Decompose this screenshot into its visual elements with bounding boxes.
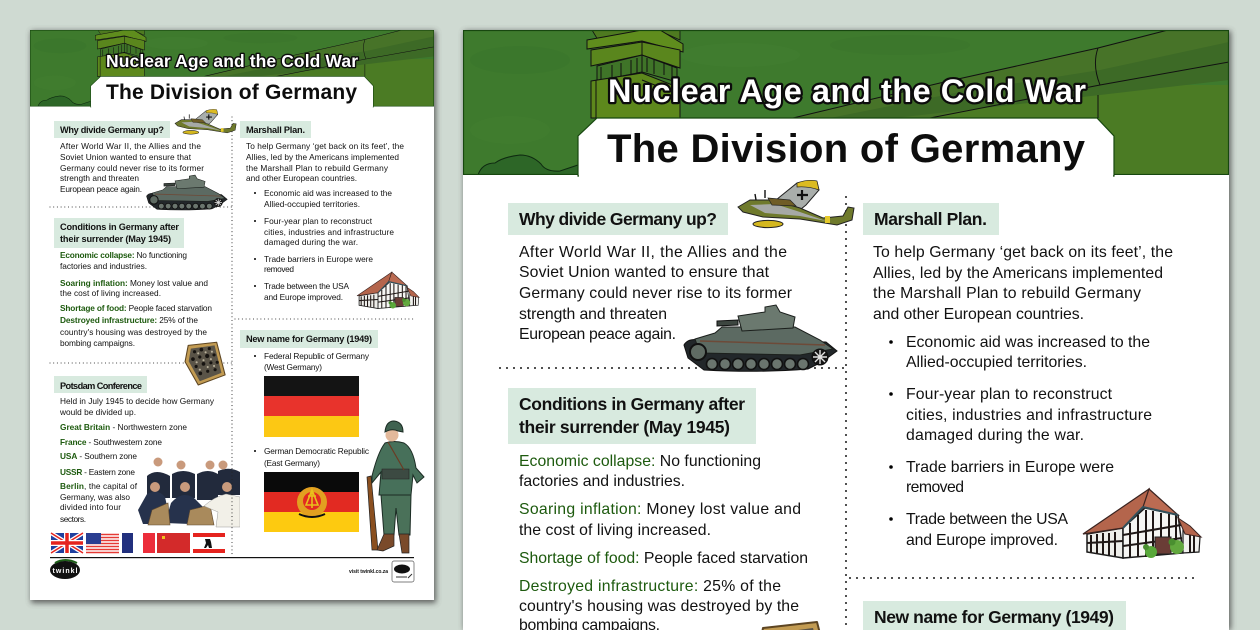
small section: Potsdam Conference: Berlin, the capital of bbox=[60, 481, 138, 491]
small section: conditions in Germany: Shortage of food: People faced starvation bbox=[60, 303, 212, 313]
large poster main title: The Division of Germany bbox=[607, 127, 1086, 171]
section: why divide Germany up: Germany could never rise to its former bbox=[519, 285, 792, 302]
large poster header banner bbox=[463, 30, 1229, 178]
icon: small tank bbox=[147, 175, 227, 210]
small section: conditions in Germany: Destroyed infrastructure: 25% of the bbox=[60, 315, 198, 325]
small section: Potsdam Conference: Germany, was also bbox=[60, 492, 130, 502]
small section: Potsdam Conference: USSR - Eastern zone bbox=[60, 467, 135, 477]
small section: new name for Germany: (West Germany) bbox=[264, 362, 322, 372]
section: conditions in Germany after surrender: Soaring inflation: Money lost value and bbox=[519, 501, 801, 518]
panel: small full poster preview bbox=[30, 30, 436, 603]
section: Marshall Plan: Trade barriers in Europe were bbox=[906, 459, 1114, 476]
small poster header banner bbox=[30, 30, 434, 108]
section: why divide Germany up: Why divide Germany up? bbox=[519, 209, 717, 229]
small section: why divide Germany: strength and threaten bbox=[60, 173, 139, 183]
section: why divide Germany up: European peace again. bbox=[519, 326, 676, 343]
section: why divide Germany up: Soviet Union wanted to ensure that bbox=[519, 264, 770, 281]
section: Marshall Plan: cities, industries and infrastructure bbox=[906, 407, 1152, 424]
icon: soldier bbox=[367, 421, 424, 553]
small section: Marshall Plan: Trade between the USA bbox=[264, 281, 349, 291]
flag: USSR bbox=[157, 533, 190, 553]
section: Marshall Plan bbox=[863, 203, 1173, 549]
small section: conditions in Germany: Soaring inflation: Money lost value and bbox=[60, 278, 208, 288]
section: Marshall Plan: the Marshall Plan to rebuild Germany bbox=[873, 285, 1141, 302]
section: why divide Germany up: strength and threaten bbox=[519, 306, 667, 323]
small section: new name for Germany: New name for Germany (1949) bbox=[246, 334, 372, 344]
section: conditions in Germany after surrender: Shortage of food: People faced starvation bbox=[519, 550, 808, 567]
section: Marshall Plan: Allied-occupied territories. bbox=[906, 354, 1087, 371]
icon: plane bbox=[738, 180, 854, 228]
section: conditions in Germany after surrender: their surrender (May 1945) bbox=[519, 417, 730, 437]
small poster series title: Nuclear Age and the Cold War bbox=[106, 51, 358, 71]
flag: United States bbox=[86, 533, 119, 553]
icon: half-timbered house bbox=[1083, 489, 1201, 558]
small poster main title: The Division of Germany bbox=[106, 81, 357, 104]
section: new name for Germany: New name for Germany (1949) bbox=[874, 607, 1114, 627]
footer website text: visit twinkl.co.za bbox=[349, 569, 388, 575]
small section: Marshall Plan bbox=[240, 121, 404, 302]
section: Marshall Plan: damaged during the war. bbox=[906, 427, 1084, 444]
small section: why divide Germany: Why divide Germany up? bbox=[60, 125, 164, 135]
small section: Marshall Plan: To help Germany ‘get back on its feet’, the bbox=[246, 141, 404, 151]
small section: Marshall Plan: Allies, led by the Americans implemented bbox=[246, 152, 399, 162]
section: Marshall Plan: Trade between the USA bbox=[906, 511, 1068, 528]
small section: why divide Germany bbox=[54, 121, 204, 194]
section: Marshall Plan: Marshall Plan. bbox=[874, 209, 987, 229]
small section: Marshall Plan: Four-year plan to reconstruct bbox=[264, 216, 373, 226]
small poster dotted dividers bbox=[50, 117, 415, 555]
section: new name for Germany bbox=[863, 601, 1126, 630]
small section: Potsdam Conference: would be divided up. bbox=[59, 407, 136, 417]
small section: why divide Germany: After World War II, the Allies and the bbox=[60, 141, 201, 151]
flag: West Germany bbox=[264, 376, 359, 437]
small section: Potsdam Conference: France - Southwestern zone bbox=[60, 437, 162, 447]
flag: France bbox=[122, 533, 155, 553]
icon: bread bbox=[762, 621, 820, 630]
section: Marshall Plan: and other European countries. bbox=[873, 306, 1084, 323]
section: conditions in Germany after surrender: Economic collapse: No functioning bbox=[519, 453, 761, 470]
logo: twinkl: twinkl bbox=[52, 568, 78, 575]
footer quality badge bbox=[392, 561, 414, 582]
small section: new name for Germany: Federal Republic of Germany bbox=[264, 351, 370, 361]
section: conditions in Germany after surrender: Destroyed infrastructure: 25% of the bbox=[519, 578, 781, 595]
small section: Marshall Plan: Allied-occupied territories. bbox=[264, 199, 360, 209]
small section: Marshall Plan: and other European countries. bbox=[246, 173, 357, 183]
flag: Berlin bbox=[193, 533, 225, 553]
small section: Marshall Plan: the Marshall Plan to rebuild Germany bbox=[246, 163, 389, 173]
section: conditions in Germany after surrender: the cost of living increased. bbox=[519, 522, 711, 539]
small section: new name for Germany bbox=[240, 330, 378, 468]
section: why divide Germany up bbox=[508, 203, 792, 343]
small section: Marshall Plan: removed bbox=[264, 264, 294, 274]
small section: Marshall Plan: and Europe improved. bbox=[264, 292, 343, 302]
small section: new name for Germany: (East Germany) bbox=[264, 458, 320, 468]
section: Marshall Plan: Economic aid was increased to the bbox=[906, 334, 1150, 351]
section: conditions in Germany after surrender: country's housing was destroyed by the bbox=[519, 598, 799, 615]
small section: why divide Germany: Germany could never rise to its former bbox=[60, 163, 204, 173]
small section: Marshall Plan: Economic aid was increased to the bbox=[264, 188, 392, 198]
small section: Marshall Plan: cities, industries and infrastructure bbox=[264, 227, 394, 237]
small section: Potsdam Conference: sectors. bbox=[60, 514, 86, 524]
small section: Potsdam Conference: Great Britain - Northwestern zone bbox=[60, 422, 187, 432]
small section: Marshall Plan: Trade barriers in Europe were bbox=[264, 254, 373, 264]
small section: Potsdam Conference: USA - Southern zone bbox=[60, 451, 137, 461]
large poster series title: Nuclear Age and the Cold War bbox=[608, 73, 1086, 109]
small section: new name for Germany: German Democratic Republic bbox=[264, 446, 369, 456]
section: Marshall Plan: and Europe improved. bbox=[906, 532, 1058, 549]
icon: tank bbox=[684, 305, 837, 371]
icon: small bread bbox=[185, 342, 225, 385]
icon: small plane bbox=[175, 109, 236, 134]
small section: conditions in Germany: their surrender (May 1945) bbox=[60, 234, 171, 244]
small section: why divide Germany: European peace again. bbox=[60, 184, 142, 194]
logo: twinkl bbox=[50, 560, 80, 579]
small section: conditions in Germany bbox=[54, 218, 212, 348]
section: conditions in Germany after surrender: Conditions in Germany after bbox=[519, 394, 745, 414]
small section: conditions in Germany: Economic collapse: No functioning bbox=[60, 250, 187, 260]
small section: Marshall Plan: damaged during the war. bbox=[264, 237, 358, 247]
section: conditions in Germany after surrender bbox=[508, 388, 808, 630]
icon: small house bbox=[357, 272, 419, 308]
small section: conditions in Germany: Conditions in Germany after bbox=[60, 222, 179, 232]
small section: why divide Germany: Soviet Union wanted to ensure that bbox=[60, 152, 192, 162]
illustration: Potsdam Conference leaders bbox=[138, 458, 240, 527]
section: conditions in Germany after surrender: factories and industries. bbox=[519, 473, 685, 490]
footer line bbox=[50, 557, 414, 558]
section: Marshall Plan: Allies, led by the Americans implemented bbox=[873, 265, 1163, 282]
small section: Potsdam Conference: divided into four bbox=[60, 502, 121, 512]
small section: Potsdam Conference: Held in July 1945 to decide how Germany bbox=[60, 396, 215, 406]
section: Marshall Plan: To help Germany ‘get back on its feet’, the bbox=[873, 244, 1173, 261]
small section: Marshall Plan: Marshall Plan. bbox=[246, 125, 305, 135]
flag: East Germany bbox=[264, 472, 359, 532]
small section: Potsdam Conference: Potsdam Conference bbox=[60, 381, 142, 391]
section: why divide Germany up: After World War II, the Allies and the bbox=[519, 244, 787, 261]
section: Marshall Plan: Four-year plan to reconstruct bbox=[906, 386, 1113, 403]
large poster dotted dividers bbox=[500, 197, 1195, 629]
section: Marshall Plan: removed bbox=[906, 479, 964, 496]
small section: conditions in Germany: the cost of living increased. bbox=[60, 288, 161, 298]
small section: conditions in Germany: factories and industries. bbox=[60, 261, 147, 271]
small section: conditions in Germany: country's housing was destroyed by the bbox=[60, 327, 207, 337]
small section: conditions in Germany: bombing campaigns. bbox=[60, 338, 135, 348]
small section: Potsdam Conference bbox=[54, 376, 215, 524]
flag: United Kingdom bbox=[51, 533, 83, 553]
panel: large zoomed poster bbox=[463, 30, 1231, 630]
